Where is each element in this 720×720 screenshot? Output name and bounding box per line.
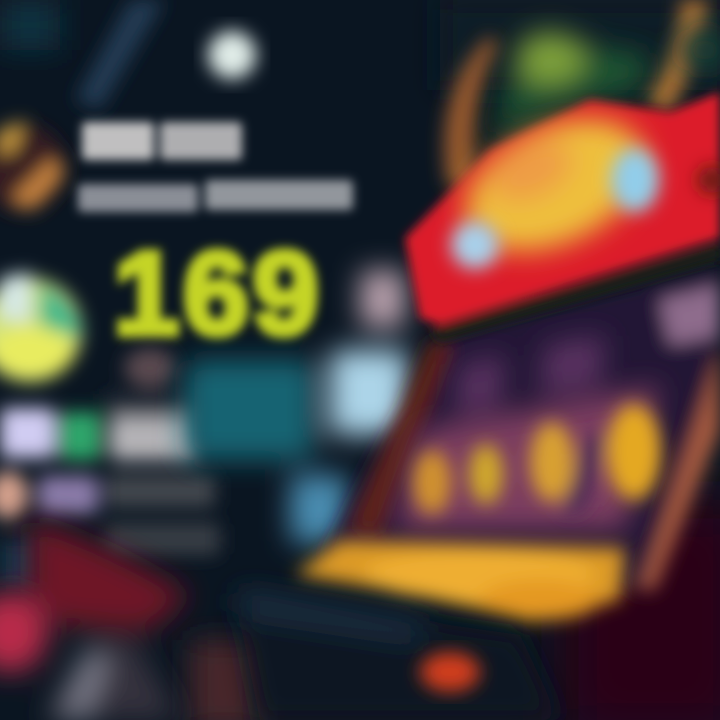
reel symbols: [413, 404, 661, 515]
green leaves: [490, 28, 720, 135]
canopy lights: [451, 148, 720, 269]
machine body: [320, 265, 720, 590]
canopy glow: [444, 92, 666, 278]
horns: [444, 0, 708, 190]
illustration: slot machine: [235, 0, 720, 720]
icon: white glow dot: [208, 31, 256, 79]
red canopy: [405, 92, 720, 342]
red shape bottom left: [0, 520, 190, 720]
list: blurred rows: [0, 348, 220, 585]
machine base: [235, 590, 560, 720]
icon: colour wheel: [0, 272, 84, 382]
heading: blurred title lines: [78, 122, 353, 212]
coins: [295, 540, 625, 622]
teal and blue panels: [185, 270, 408, 543]
red button: [420, 652, 480, 692]
logo icon: [0, 120, 66, 212]
figure: 169: 169: [114, 228, 322, 360]
reels: [395, 335, 660, 530]
